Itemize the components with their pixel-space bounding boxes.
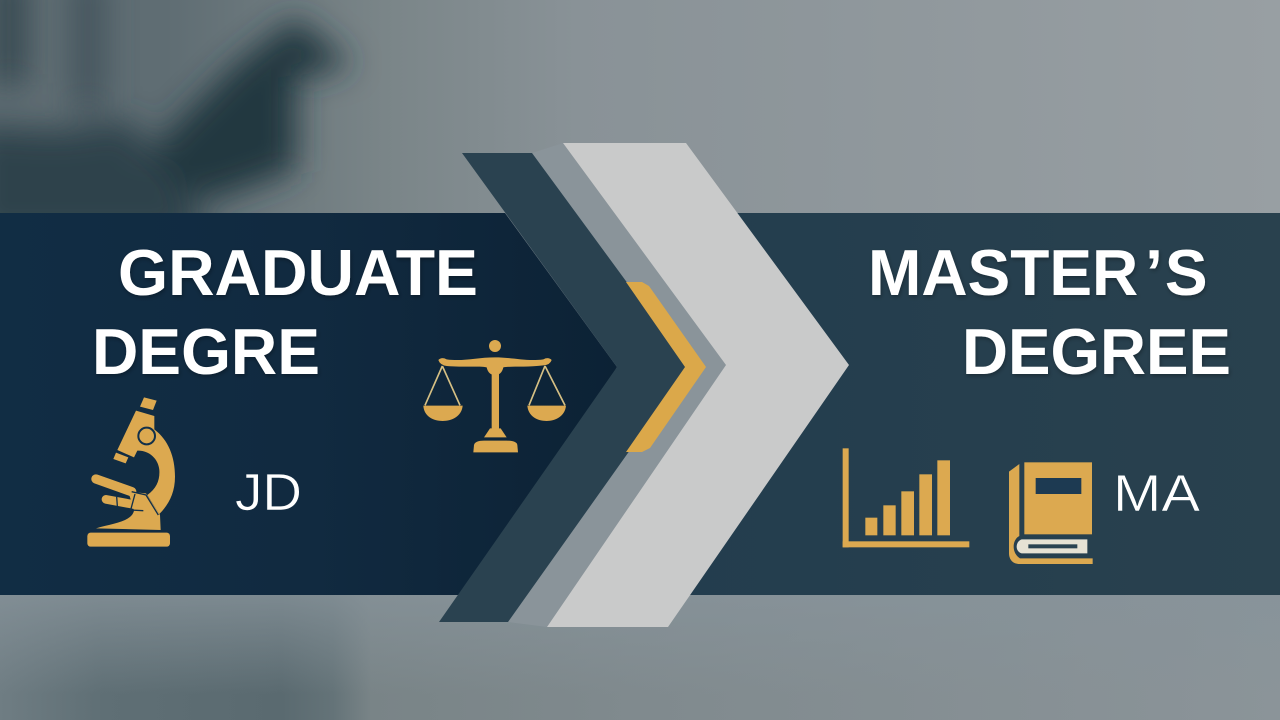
icon: scales of justice [423,340,566,452]
right band: master's degree [685,213,1280,595]
icon: book [1009,462,1093,564]
gold chevron [626,282,706,452]
heading: master's degree: DEGREE [962,315,1231,388]
label: MA: MA [1113,465,1200,523]
left band: graduate degree [0,213,617,595]
heading: graduate degree [92,236,478,388]
heading: master's degree [868,237,1231,388]
grey chevron [508,143,726,627]
heading: graduate degree: GRADUATE [118,236,478,309]
icon: microscope [87,397,175,547]
icon: bar chart [843,448,969,547]
dark chevron [439,153,689,622]
heading: master's degree: MASTER’S [868,237,1208,309]
heading: graduate degree: DEGRE [92,315,320,388]
light chevron [547,143,849,627]
label: JD: JD [235,464,302,522]
